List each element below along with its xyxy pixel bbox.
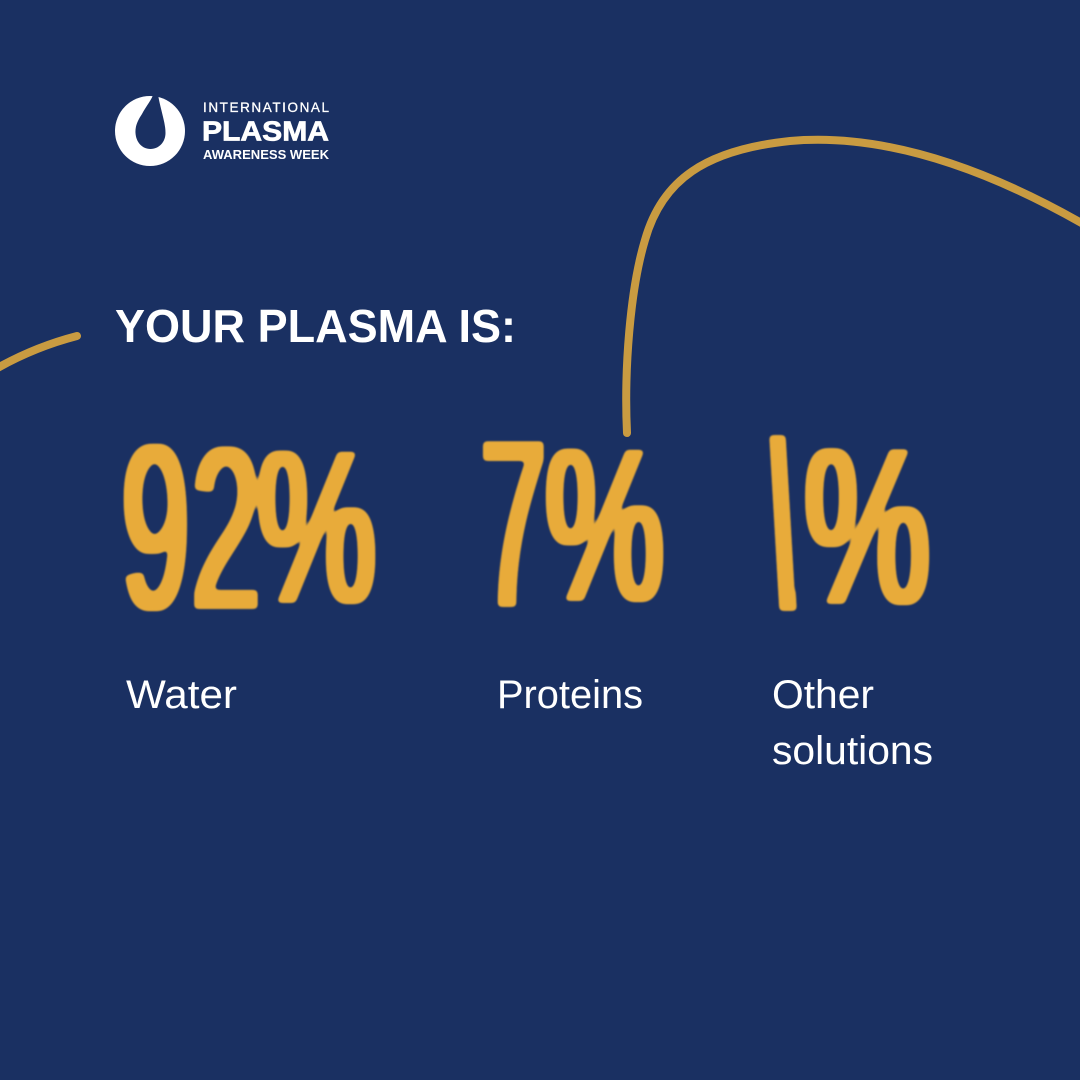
logo text: PLASMA (202, 116, 329, 146)
arrow: curved line left (0, 336, 77, 370)
number: 92%: % (257, 407, 376, 649)
label: other solutions: solutions (772, 729, 933, 773)
number: 92%: 2 (192, 401, 260, 658)
number: 1%: % (804, 403, 930, 651)
number: 7%: 7 (481, 391, 546, 657)
logo text: INTERNATIONAL (203, 100, 329, 115)
number: 1% (768, 434, 930, 612)
number: 1%: 1 (743, 382, 818, 665)
number: 7%: % (545, 405, 664, 647)
label: other solutions: Other (772, 673, 874, 717)
logo text (202, 100, 329, 162)
number: 7% (481, 391, 664, 657)
stat: 7% proteins (481, 391, 664, 717)
logo text: AWARENESS WEEK (203, 148, 329, 162)
logo (115, 92, 329, 166)
label: water: Water (126, 673, 237, 717)
number: 92% (122, 398, 376, 658)
icon: plasma drop (115, 92, 185, 166)
stat: 1% other solutions (768, 434, 932, 764)
arrow: curved line top right (626, 140, 1080, 433)
label: proteins: Proteins (497, 673, 643, 717)
stat: 92% water (122, 398, 376, 717)
number: 92%: 9 (122, 398, 189, 658)
infographic canvas (0, 96, 1080, 764)
heading: YOUR PLASMA IS: (115, 300, 516, 352)
label: other solutions (772, 673, 933, 773)
